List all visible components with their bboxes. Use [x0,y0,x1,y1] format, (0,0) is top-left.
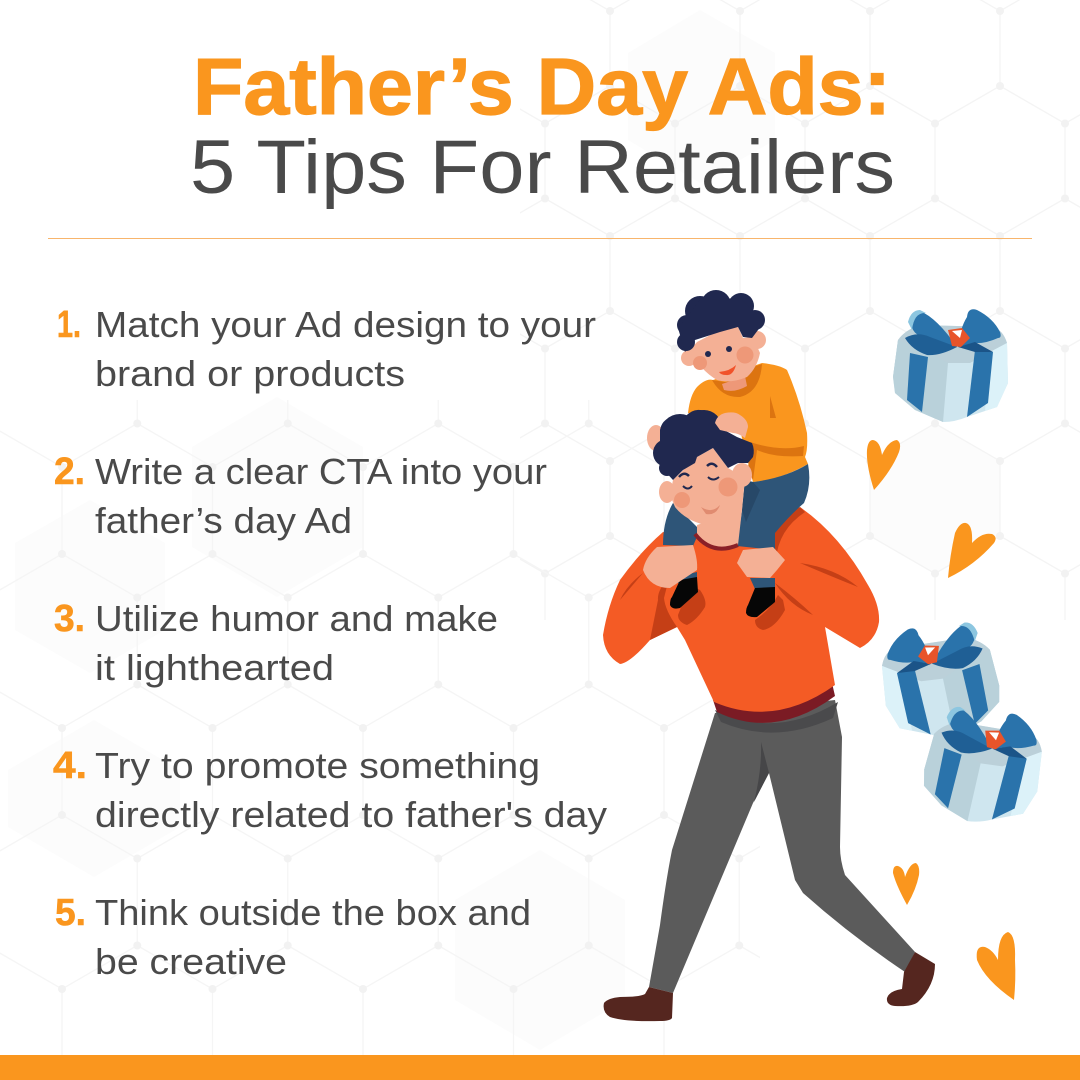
father's head [659,448,752,525]
gift box bottom [918,703,1048,830]
tip 5 [55,892,531,982]
tip 5: be creative [95,941,287,982]
father's hand on head [715,412,748,438]
heart 4 [977,932,1015,1000]
heart 1 [867,440,900,490]
sweater shadows and folds [620,507,858,640]
tip 4: Try to promote something [95,745,540,786]
waist hem [713,683,835,723]
tip 4: 4. [53,745,87,787]
title: Father’s Day Ads: [193,42,891,131]
title [190,42,895,210]
tip 3: it lighthearted [95,647,334,688]
tip 2: father’s day Ad [95,500,352,541]
gift box top [893,309,1008,422]
father's hands [643,425,785,588]
illustration: father carrying son on shoulders [603,290,935,1021]
tip 4: directly related to father's day [95,794,607,835]
tip 2: 2. [54,451,85,493]
tip 1 [57,304,596,394]
tip 3: 3. [54,598,85,640]
boy's far leg [663,503,700,546]
boy's orange-yellow sweater [688,363,808,482]
tip 1: 1. [57,304,81,346]
father's collar [695,534,738,549]
title: 5 Tips For Retailers [190,125,895,210]
boy's leg shade [742,480,760,522]
father's hair [653,410,754,480]
tip 4 [53,745,607,835]
tip 3 [54,598,498,688]
father's shoes [604,952,935,1021]
tip 5: Think outside the box and [95,892,531,933]
boy's head [681,327,766,391]
boy's lower legs [675,572,775,589]
boy's shoes [670,577,775,617]
father's neck [697,510,742,547]
heart 3 [893,863,919,905]
gift box middle [877,619,1005,744]
father's trousers [649,700,915,993]
father's orange sweater [603,507,879,712]
tip 2 [54,451,547,541]
tip 3: Utilize humor and make [95,598,498,639]
bottom orange bar [0,1055,1080,1080]
boy's hair [677,290,765,352]
tip 2: Write a clear CTA into your [95,451,547,492]
tip 1: Match your Ad design to your [95,304,596,345]
tip 5: 5. [55,892,86,934]
heart 2 [948,523,996,578]
tip 1: brand or products [95,353,405,394]
boy's sweater details [712,364,804,480]
boy's legs [737,464,809,550]
